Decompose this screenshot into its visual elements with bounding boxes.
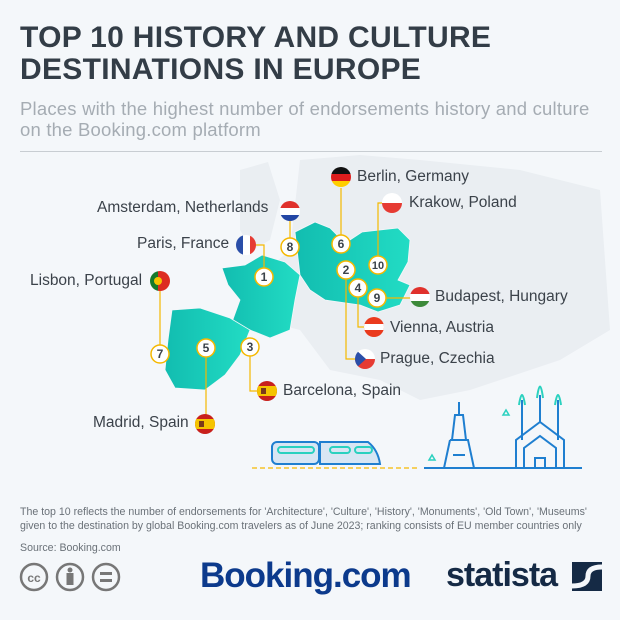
country shapes [165, 222, 410, 390]
number markers: 7 [157, 347, 164, 361]
number markers: 3 [247, 340, 254, 354]
title [20, 21, 491, 86]
footnote: Source: Booking.com [20, 542, 121, 554]
number markers: 6 [338, 237, 345, 251]
number markers: 9 [374, 291, 381, 305]
text: Lisbon, Portugal [30, 272, 142, 289]
text: Madrid, Spain [93, 414, 189, 431]
statista logo: statista [446, 556, 557, 594]
background europe [255, 155, 610, 400]
text: Budapest, Hungary [435, 288, 568, 305]
flags [150, 167, 430, 434]
map [150, 155, 610, 469]
license icons [20, 562, 120, 592]
text: Vienna, Austria [390, 319, 494, 336]
text: Amsterdam, Netherlands [97, 199, 268, 216]
text: Krakow, Poland [409, 194, 517, 211]
text: Prague, Czechia [380, 350, 495, 367]
title: DESTINATIONS IN EUROPE [20, 53, 421, 86]
subtitle: Places with the highest number of endorsements history and culture on the Booking.com platform [20, 98, 590, 140]
number markers: 8 [287, 240, 294, 254]
number markers [151, 235, 387, 363]
number markers: 10 [372, 260, 384, 272]
number markers: 1 [261, 270, 268, 284]
footnote [20, 506, 587, 554]
leader lines [160, 188, 412, 424]
text: Barcelona, Spain [283, 382, 401, 399]
text: Paris, France [137, 235, 229, 252]
number markers: 5 [203, 341, 210, 355]
city labels: Berlin, Germany [357, 168, 469, 185]
title: TOP 10 HISTORY AND CULTURE [20, 21, 491, 54]
illustration: train and landmarks [252, 386, 582, 468]
Booking.com logo: Booking.com [200, 556, 411, 595]
number markers: 2 [343, 263, 350, 277]
number markers: 4 [355, 281, 362, 295]
license icons: cc [27, 571, 41, 585]
footnote: The top 10 reflects the number of endorsements for 'Architecture', 'Culture', 'History', 'Monuments', 'Old Town', 'Museums' given to the destination by global Booking.com travelers as of June 2023; ranking consists of EU member countries only [20, 506, 587, 532]
